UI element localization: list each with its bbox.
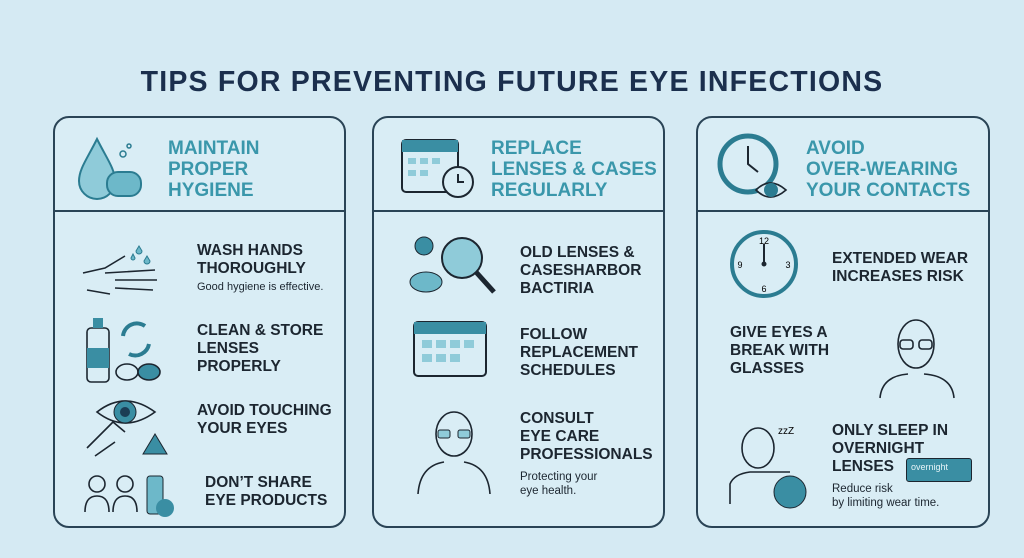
- heading: MAINTAIN: [168, 138, 259, 159]
- item: follow schedules: FOLLOW: [520, 326, 587, 343]
- icon: drop and soap: [78, 136, 142, 200]
- heading: REPLACE: [491, 138, 582, 159]
- item: extended wear: 9: [737, 260, 743, 270]
- item: consult: eye health.: [520, 485, 576, 497]
- item: clean & store: LENSES: [197, 340, 259, 357]
- item: extended wear: 12: [759, 236, 769, 246]
- heading: YOUR CONTACTS: [806, 180, 970, 201]
- item: don't share: DON’T SHARE: [205, 474, 312, 491]
- item: extended wear: 6: [761, 284, 767, 294]
- item: bacteria: OLD LENSES &: [520, 244, 635, 261]
- item: clean & store: PROPERLY: [197, 358, 281, 375]
- item: clean & store: [86, 318, 323, 383]
- item: sleep: Reduce risk: [832, 483, 893, 495]
- item: sleep: zzZ: [778, 426, 794, 437]
- item: glasses break: GLASSES: [730, 360, 804, 377]
- item: consult: PROFESSIONALS: [520, 446, 653, 463]
- item: bacteria: CASESHARBOR: [520, 262, 641, 279]
- item: wash hands: Good hygiene is effective.: [197, 281, 323, 293]
- heading: OVER-WEARING: [806, 159, 958, 180]
- item: glasses break: GIVE EYES A: [730, 324, 828, 341]
- item: don't share: [84, 474, 327, 517]
- item: sleep: LENSES: [832, 458, 894, 475]
- item: sleep: [729, 422, 972, 509]
- item: consult: EYE CARE: [520, 428, 599, 445]
- heading: [168, 138, 259, 201]
- icon: clock eye: [718, 134, 788, 198]
- panel: hygiene: [53, 116, 346, 528]
- item: clean & store: CLEAN & STORE: [197, 322, 323, 339]
- item: follow schedules: REPLACEMENT: [520, 344, 638, 361]
- item: don't share: EYE PRODUCTS: [205, 492, 327, 509]
- item: consult: Protecting your: [520, 471, 597, 483]
- heading: REGULARLY: [491, 180, 607, 201]
- item: bacteria: BACTIRIA: [520, 280, 594, 297]
- icon: calendar clock: [401, 139, 474, 198]
- item: extended wear: [730, 230, 968, 298]
- heading: HYGIENE: [168, 180, 254, 201]
- item: avoid touching: AVOID TOUCHING: [197, 402, 332, 419]
- panel: over-wearing: [696, 116, 990, 528]
- heading: PROPER: [168, 159, 248, 180]
- item: avoid touching: [86, 400, 332, 457]
- heading: [491, 138, 657, 201]
- title: TIPS FOR PREVENTING FUTURE EYE INFECTIONS: [141, 66, 883, 98]
- item: wash hands: [82, 242, 323, 295]
- heading: LENSES & CASES: [491, 159, 657, 180]
- item: sleep: by limiting wear time.: [832, 497, 939, 509]
- heading: AVOID: [806, 138, 865, 159]
- item: follow schedules: SCHEDULES: [520, 362, 616, 379]
- heading: [806, 138, 970, 201]
- item: consult: CONSULT: [520, 410, 594, 427]
- item: wash hands: THOROUGHLY: [197, 260, 306, 277]
- item: glasses break: [730, 319, 955, 398]
- item: consult: [417, 410, 653, 497]
- item: follow schedules: [413, 321, 638, 379]
- item: avoid touching: YOUR EYES: [197, 420, 287, 437]
- item: sleep: overnight: [911, 462, 948, 472]
- item: extended wear: EXTENDED WEAR: [832, 250, 968, 267]
- item: sleep: ONLY SLEEP IN: [832, 422, 948, 439]
- item: wash hands: WASH HANDS: [197, 242, 303, 259]
- panel: replace: [372, 116, 665, 528]
- item: bacteria: [410, 236, 641, 297]
- item: extended wear: 3: [785, 260, 791, 270]
- item: sleep: OVERNIGHT: [832, 440, 924, 457]
- item: glasses break: BREAK WITH: [730, 342, 829, 359]
- item: extended wear: INCREASES RISK: [832, 268, 964, 285]
